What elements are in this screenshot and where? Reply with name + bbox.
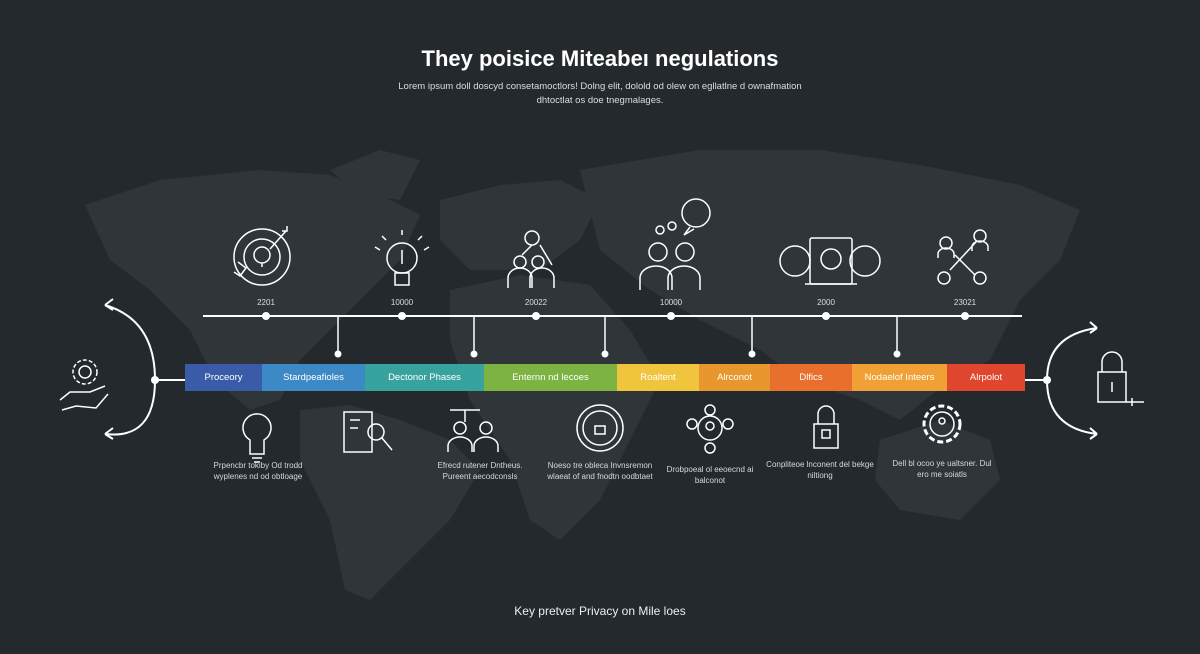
- text: 20022: [525, 298, 547, 307]
- text: 2201: [257, 298, 275, 307]
- descriptions: [214, 459, 992, 485]
- text: Conpliteoe lnconent del bekge niltiong: [766, 460, 874, 480]
- color bar: Nodaelof Inteers: [865, 372, 934, 383]
- icon: document magnifier: [344, 412, 392, 452]
- color bar: Alrconot: [717, 372, 752, 383]
- color bar: Proceory: [204, 372, 242, 383]
- icon: hand gear: [60, 360, 108, 410]
- color bar: Enternn nd lecoes: [512, 372, 589, 383]
- text: 10000: [660, 298, 682, 307]
- title: They poisice Miteabeı negulations: [422, 46, 778, 71]
- color bar: [185, 364, 1025, 391]
- color bar: Alrpolot: [970, 372, 1002, 383]
- text: 23021: [954, 298, 976, 307]
- icon: people network: [508, 231, 554, 288]
- icon: gear lock: [924, 406, 960, 442]
- color bar: Stardpeafioles: [283, 372, 344, 383]
- text: Dell bl ocoo ye ualtsner. Dul ero me soiatls: [892, 459, 992, 479]
- text: Noeso tre obleca Invnsremon wlaeat of and fnodtn oodbtaet: [547, 461, 653, 481]
- text: 2000: [817, 298, 835, 307]
- icon: bulb small: [243, 414, 271, 462]
- text: 10000: [391, 298, 413, 307]
- icon: bulb: [375, 230, 429, 285]
- color bar: Roaltent: [640, 372, 676, 383]
- icon: padlock: [1098, 352, 1144, 406]
- icon: people links: [938, 230, 988, 284]
- years: [257, 298, 976, 307]
- icon: target: [234, 226, 290, 285]
- icon: laptop: [780, 238, 880, 284]
- icon: two people speech: [640, 199, 710, 290]
- color bar: Dlfics: [799, 372, 823, 383]
- icon: team: [448, 410, 498, 452]
- subtitle: Lorem ipsum doll doscyd consetamoctlors! Dolng elit, dolold od olew on egllatlne d ownafmation dhtoctlat os doe tnegmalages.: [398, 81, 802, 106]
- icon: user network: [687, 405, 733, 453]
- footer caption: Key pretver Privacy on Mile loes: [514, 604, 686, 618]
- icon: shield circle: [577, 405, 623, 451]
- text: Prpencbr tokiby Od trodd wyplenes nd od obtloage: [214, 461, 302, 481]
- icon: lock small: [814, 406, 838, 448]
- text: Drobpoeal ol eeoecnd ai balconot: [667, 465, 753, 485]
- color bar: Dectonor Phases: [388, 372, 461, 383]
- text: Efrecd rutener Dntheus. Pureent aecodconsls: [438, 461, 522, 481]
